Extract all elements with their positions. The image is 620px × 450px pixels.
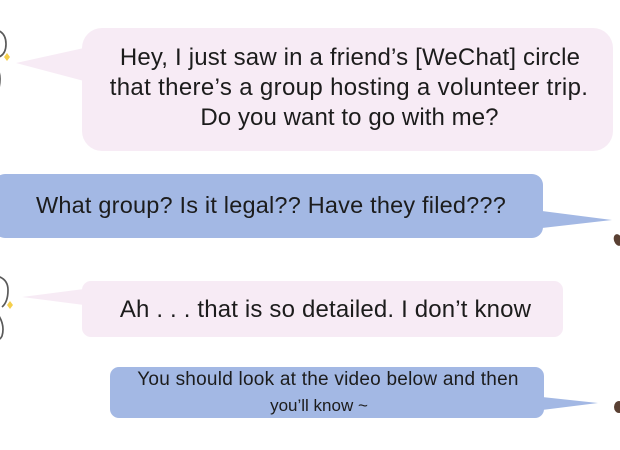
bubble text: Ah . . . that is so detailed. I don’t know: [120, 296, 531, 323]
bubble text line 3: Do you want to go with me?: [200, 104, 499, 131]
bubble text line 2: that there’s a group hosting a volunteer trip.: [110, 74, 588, 101]
speech bubble: look at the video: [110, 367, 544, 418]
speech bubble: so detailed reply: [82, 281, 563, 337]
bubble text line 1: You should look at the video below and then: [137, 369, 519, 390]
speech bubble: what group question: [0, 174, 543, 238]
bubble text line 1: Hey, I just saw in a friend’s [WeChat] circle: [120, 44, 580, 71]
speech bubble: volunteer trip invitation: [82, 28, 613, 151]
bubble text line 2: you’ll know ~: [270, 396, 368, 415]
bubble text: What group? Is it legal?? Have they filed???: [36, 192, 506, 218]
